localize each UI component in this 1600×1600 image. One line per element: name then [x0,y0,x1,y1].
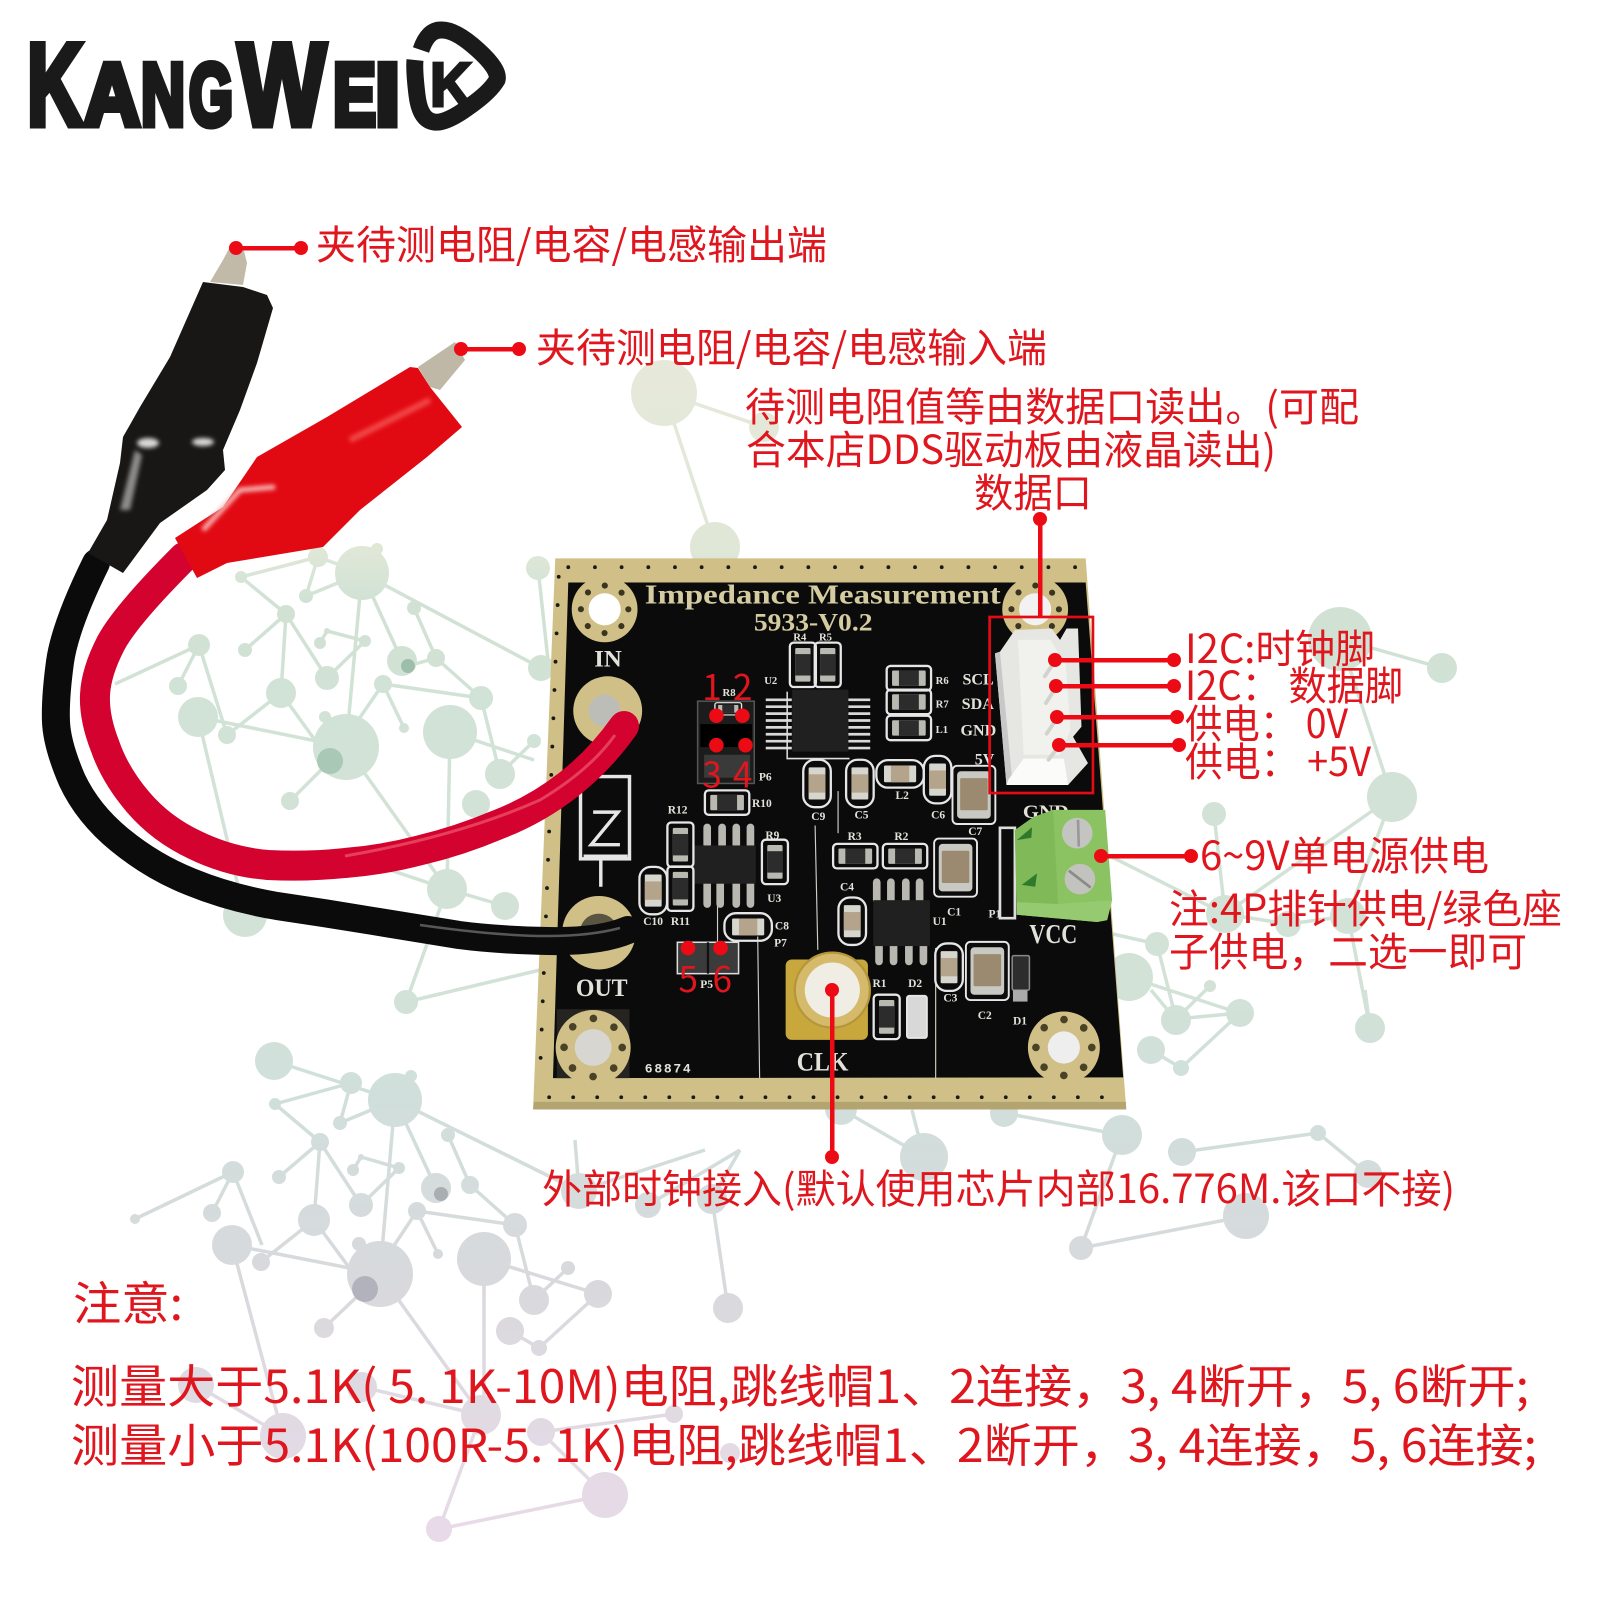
mounting pad top left [572,576,638,642]
jumper header P6 [698,701,754,783]
silk labels: C9 [811,811,826,823]
silk labels: R4 [793,631,807,643]
jumper pin numbers: 3 [702,747,722,798]
external clock arrow line [825,983,839,1164]
silk labels: R2 [894,831,909,843]
silk labels: C5 [855,810,869,822]
logo wordmark [27,19,400,150]
logo wordmark: N [141,45,185,144]
external clock label: 外部时钟接入(默认使用芯片内部16.776M.该口不接) [542,1157,1455,1215]
data port arrow line [1033,512,1047,618]
black test lead wire [56,563,628,941]
connector pin callout lines [1048,653,1186,752]
notes body: 测量大于5.1K( 5. 1K-10M)电阻,跳线帽1、2连接，3, 4断开，5, 6断开; [71,1351,1529,1417]
pin labels: I2C:时钟脚 [1185,617,1375,675]
silk labels: SCL [962,672,994,689]
silk labels: C8 [775,921,789,933]
red clip rubber boot [175,367,462,578]
mounting pad bottom right [1028,1012,1100,1083]
silk labels: L2 [895,790,909,802]
silk labels: R3 [848,831,862,843]
jumper pin numbers: 1 [702,660,722,711]
trace lines [718,791,936,1078]
silk labels: 5V [975,751,995,768]
silk labels: GND [961,723,996,740]
pin labels [1185,617,1403,788]
jumper pin numbers [678,660,752,1003]
logo emblem: K [430,51,472,120]
silk labels: GND [1023,802,1069,823]
PCB board [533,558,1126,1110]
silk labels: R12 [668,804,688,816]
chip U3 [693,827,756,904]
edge via dots [540,567,1116,1097]
logo wordmark: I [375,45,400,144]
red test lead wire [95,557,624,866]
silk labels: R10 [752,798,772,810]
callout: input terminal line [454,342,526,356]
silk labels: R8 [722,687,736,699]
notes body [71,1351,1537,1476]
pin 4-pin highlight box [990,617,1093,793]
silk labels: R7 [936,699,949,711]
silk labels: C2 [978,1010,992,1022]
power note: 子供电，二选一即可 [1169,920,1527,978]
silk labels: CLK [797,1046,849,1076]
silk labels: 68874 [645,1061,691,1076]
jumper pin numbers: 6 [713,952,732,1003]
black clip rubber boot [88,282,273,573]
silk labels: P6 [759,771,772,783]
black clip metal jaw [210,243,247,285]
silk labels: C6 [931,810,945,822]
SMD components [639,643,1029,1039]
callout: input terminal label: 夹待测电阻/电容/电感输入端 [536,316,1047,374]
power note: 注:4P排针供电/绿色座 [1169,877,1562,935]
data port description: 待测电阻值等由数据口读出。(可配 [745,375,1359,433]
notes heading: 注意: [73,1268,183,1334]
NTC symbol silkscreen [581,777,630,887]
silk labels: VCC [1029,918,1077,949]
logo emblem [415,30,497,122]
logo wordmark: A [84,45,140,144]
jumper pin numbers: 4 [733,747,752,798]
pin labels: 供电： 0V [1185,692,1348,750]
power note [1169,877,1562,978]
jumper header P5 [677,942,739,974]
logo wordmark: W [238,19,326,150]
silk labels: P5 [700,979,713,991]
silk labels: OUT [576,974,628,1002]
data port description: 合本店DDS驱动板由液晶读出) [746,418,1276,476]
silk labels: R6 [936,675,949,687]
power label: 6~9V单电源供电 [1200,824,1489,882]
chip U2 [779,690,858,759]
mounting pad bottom left [556,1010,631,1085]
callout: output terminal line [229,241,308,255]
silk labels: R1 [873,978,887,990]
green power terminal block [1000,810,1112,922]
black alligator clip [88,243,273,573]
silk labels: C1 [947,906,961,918]
silk labels: IN [594,646,622,672]
data port label: 数据口 [974,461,1092,519]
pin labels: I2C： 数据脚 [1185,654,1403,712]
board version silkscreen: 5933-V0.2 [754,608,873,636]
silk labels: SDA [962,696,994,713]
4-pin white data connector [995,628,1088,785]
red clip metal jaw [418,342,465,390]
data port description [745,375,1359,476]
pin labels: 供电： +5V [1185,730,1371,788]
red alligator clip [175,342,465,578]
IN terminal pad [573,676,642,745]
lower-left panel tint [557,1009,630,1078]
chip U1 [873,882,930,961]
silk labels: C7 [968,826,982,838]
silk labels: U2 [764,675,777,687]
board title silkscreen: Impedance Measurement [645,579,1002,610]
mounting pad top right [1002,576,1068,642]
silk labels: D1 [1013,1016,1027,1028]
OUT terminal pad [562,896,636,969]
silk labels: C3 [943,993,958,1005]
silk labels: C4 [840,882,854,894]
silk labels: P7 [774,937,787,949]
silk labels: U3 [767,893,782,905]
jumper pin numbers: 2 [733,660,752,711]
background molecular network pattern [115,360,1457,1542]
silk labels: C10 [643,916,663,928]
silk labels [576,631,1077,1076]
logo wordmark: E [333,45,376,144]
board substrate gold edge [533,558,1126,1110]
silk labels: D2 [908,978,922,990]
jumper pin markers [681,708,753,955]
jumper pin numbers: 5 [678,952,698,1003]
silk labels: R5 [819,631,832,643]
logo wordmark: G [189,45,233,144]
silk labels: P1 [988,908,1001,920]
silk labels: R11 [671,916,690,928]
silk labels: L1 [936,724,948,736]
callout: output terminal label: 夹待测电阻/电容/电感输出端 [316,213,827,271]
silk labels: R9 [765,830,780,842]
silk labels: U1 [933,916,947,928]
logo wordmark: K [27,19,83,150]
black solder mask [553,583,1123,1078]
power callout line [1094,849,1198,863]
SMA clock connector [786,953,870,1040]
logo: KANGWEI brand mark [27,19,497,150]
notes body: 测量小于5.1K(100R-5. 1K)电阻,跳线帽1、2断开，3, 4连接，5, 6连接; [71,1410,1537,1476]
